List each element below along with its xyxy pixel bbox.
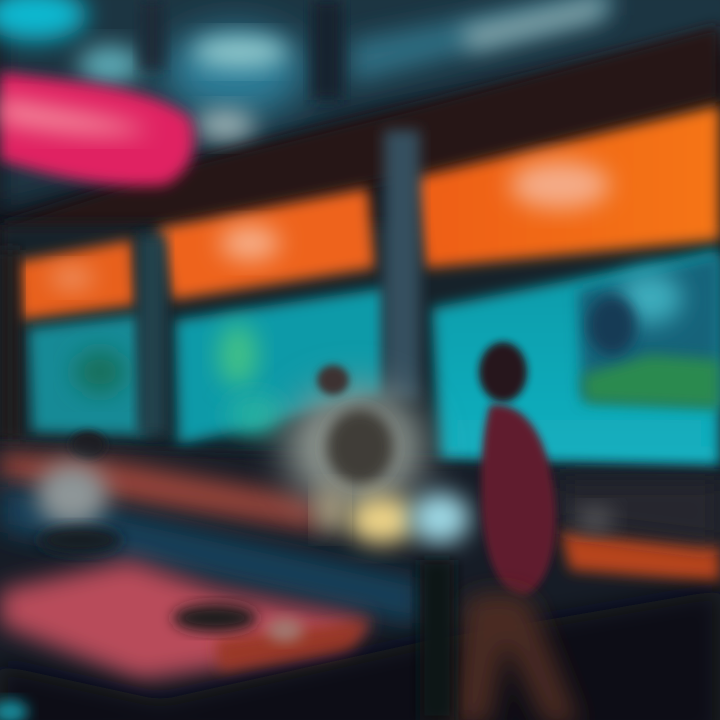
wall band <box>0 225 720 465</box>
glowing laptop and tablet <box>348 492 470 544</box>
floor shadow <box>0 590 720 720</box>
ceiling <box>0 0 720 210</box>
orange panel: left <box>15 240 136 320</box>
dark roof beam <box>0 25 720 260</box>
figure: man at counter <box>285 365 425 530</box>
figure: seated person, left <box>36 431 122 554</box>
teal screen: right <box>432 250 720 470</box>
orange panel: right <box>412 105 720 268</box>
structural pillars <box>0 130 420 440</box>
orange panel: middle <box>158 188 375 300</box>
teal screen: middle <box>175 288 385 445</box>
teal screen: left <box>28 315 145 435</box>
figure: standing woman <box>420 342 580 720</box>
neon pink sign <box>0 72 194 186</box>
table: pink foreground <box>0 560 370 680</box>
counter and seating <box>0 445 720 720</box>
